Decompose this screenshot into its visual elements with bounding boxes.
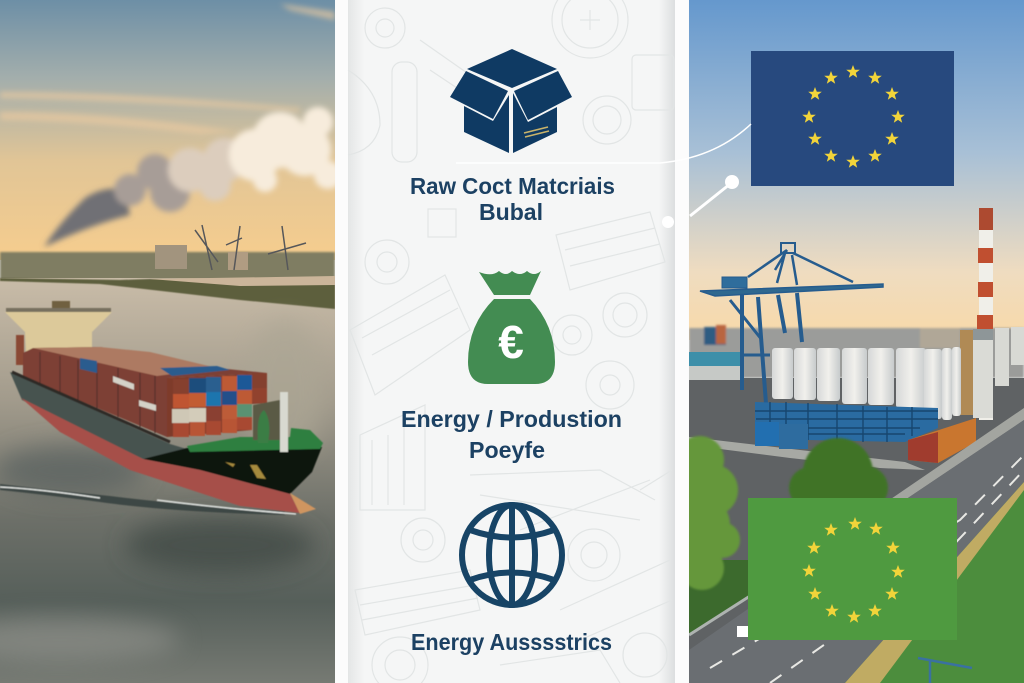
EU flag blue — [751, 51, 954, 186]
pale road apron — [689, 437, 925, 470]
ground yard — [689, 378, 1024, 650]
road markings — [710, 455, 1024, 683]
distant skyline — [689, 325, 1024, 378]
heading: raw cost materials: Raw Coct Matcriais — [410, 173, 615, 199]
centre tree — [788, 436, 890, 498]
panel: container ship photo — [0, 0, 342, 683]
bridge tower — [5, 301, 112, 365]
heading: energy production: Energy / Produstion — [401, 406, 622, 432]
guard rail — [689, 596, 750, 635]
grass bank — [845, 482, 1024, 683]
sunset sky — [0, 0, 335, 260]
main road — [689, 420, 1024, 683]
container front stack — [167, 373, 267, 437]
side containers — [23, 347, 267, 437]
panel: port and factory photo — [670, 0, 1024, 683]
near bank — [0, 278, 335, 309]
heading: energy production: Poeyfe — [469, 437, 545, 463]
marker: small white square — [737, 626, 748, 637]
panel: central icon column — [336, 0, 688, 683]
left trees — [689, 435, 741, 591]
river water — [0, 278, 335, 683]
heading: raw cost materials: Bubal — [479, 199, 543, 225]
gray hull — [10, 372, 190, 459]
red waterline — [21, 398, 300, 513]
heading: raw cost materials — [410, 173, 615, 225]
icon: euro money bag — [468, 271, 555, 384]
connector: top curve — [456, 124, 751, 163]
white silos — [772, 347, 961, 420]
back tanks — [960, 327, 1024, 415]
EU flag green — [748, 498, 957, 640]
deck rail — [12, 372, 170, 442]
sprinkler frame — [918, 658, 972, 683]
far shore with cranes — [0, 225, 335, 282]
icon: globe — [462, 505, 562, 605]
icon: euro money bag: € — [498, 316, 524, 368]
chimney — [973, 208, 993, 420]
ship wake — [0, 484, 296, 515]
black bow — [143, 447, 322, 494]
bow deck — [187, 428, 323, 452]
blue container stacks — [755, 402, 938, 449]
left field — [689, 560, 750, 635]
panel background — [336, 0, 688, 683]
smoke plume — [44, 107, 342, 247]
harbour crane — [700, 243, 883, 417]
water ripples — [0, 396, 318, 665]
heading: energy production — [401, 406, 622, 463]
container ship — [5, 301, 323, 514]
thin clouds — [0, 4, 335, 134]
orange rail wagon — [908, 418, 976, 463]
connector: dot link — [662, 175, 739, 228]
icon: open box — [450, 49, 572, 153]
blue sky — [689, 0, 1024, 340]
heading: energy logistics: Energy Ausssstrics — [411, 629, 612, 655]
road shoulder — [892, 408, 1024, 498]
faint machinery line art — [348, 0, 674, 683]
